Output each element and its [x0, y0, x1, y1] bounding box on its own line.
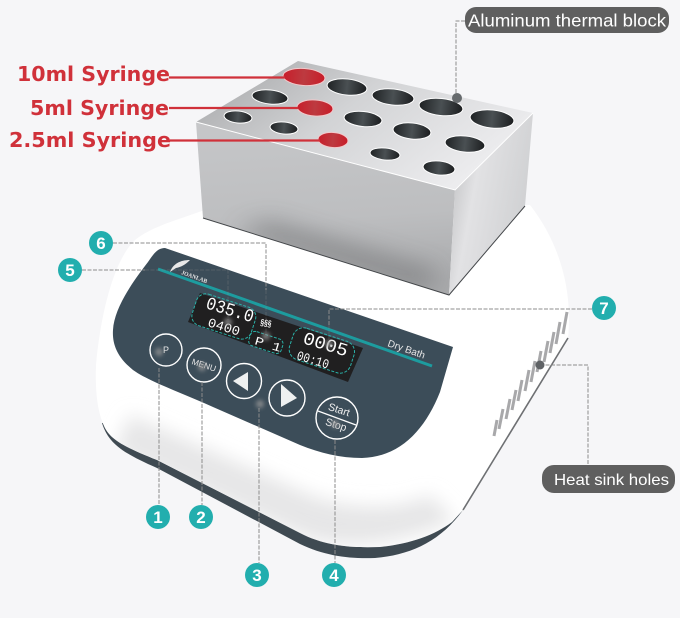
dark base edge [102, 420, 463, 558]
number badges [58, 231, 616, 587]
wells [223, 77, 515, 177]
housing right edge line [463, 338, 568, 510]
badge 4: 4 [329, 566, 339, 585]
aluminum thermal block [196, 61, 533, 295]
panel background [113, 248, 453, 458]
callout: heat sink holes: Heat sink holes [554, 472, 669, 489]
leader lines [82, 21, 592, 563]
badge 2: 2 [196, 508, 206, 527]
callout: heat sink holes [542, 465, 675, 493]
button: down [269, 380, 305, 416]
time group: 0005 [300, 330, 350, 362]
badge 3: 3 [252, 566, 262, 585]
syringe labels [9, 62, 320, 152]
product name: Dry Bath [386, 338, 426, 362]
brand logo [170, 260, 208, 285]
brand logo: JOANLAB [180, 270, 208, 285]
button: start stop [316, 397, 358, 439]
badge 7 [592, 296, 616, 320]
highlighted wells [282, 67, 348, 149]
badge 7: 7 [599, 299, 609, 318]
badge 1: 1 [153, 508, 163, 527]
block side face [449, 113, 533, 295]
program group: P 1 [253, 334, 283, 356]
time group [286, 325, 357, 376]
button: menu: MENU [191, 356, 217, 374]
10ml label: 10ml Syringe [17, 62, 170, 86]
button: up [226, 364, 262, 398]
button: start stop: Stop [324, 416, 348, 434]
badge 5 [58, 258, 82, 282]
badge 2 [189, 505, 213, 529]
control panel [113, 248, 453, 458]
badge 6: 6 [96, 234, 106, 253]
marker dots [155, 93, 544, 428]
2.5ml label: 2.5ml Syringe [9, 128, 171, 152]
callout: aluminum thermal block: Aluminum thermal block [468, 10, 666, 30]
temperature group: 035.0 [203, 295, 256, 328]
temperature group: 0400 [206, 315, 242, 339]
button: P [150, 334, 182, 366]
button: start stop: Start [327, 401, 351, 419]
program group [247, 330, 284, 356]
dry bath device [96, 205, 569, 558]
white housing [96, 205, 569, 547]
vent holes [494, 312, 567, 436]
block top face [196, 61, 533, 190]
teal stripe [158, 269, 432, 366]
heating icon: §§§ [260, 317, 272, 329]
5ml label: 5ml Syringe [30, 96, 169, 120]
badge 3 [245, 563, 269, 587]
block front face [196, 122, 455, 295]
housing shading [115, 415, 455, 544]
button: menu [187, 348, 221, 382]
display screen [188, 291, 363, 382]
temperature group [189, 291, 258, 342]
badge 6 [89, 231, 113, 255]
button: P: P [163, 345, 169, 355]
block front shadow [235, 222, 440, 290]
badge 5: 5 [65, 261, 75, 280]
badge 1 [146, 505, 170, 529]
badge 4 [322, 563, 346, 587]
time group: 00:10 [295, 348, 331, 372]
